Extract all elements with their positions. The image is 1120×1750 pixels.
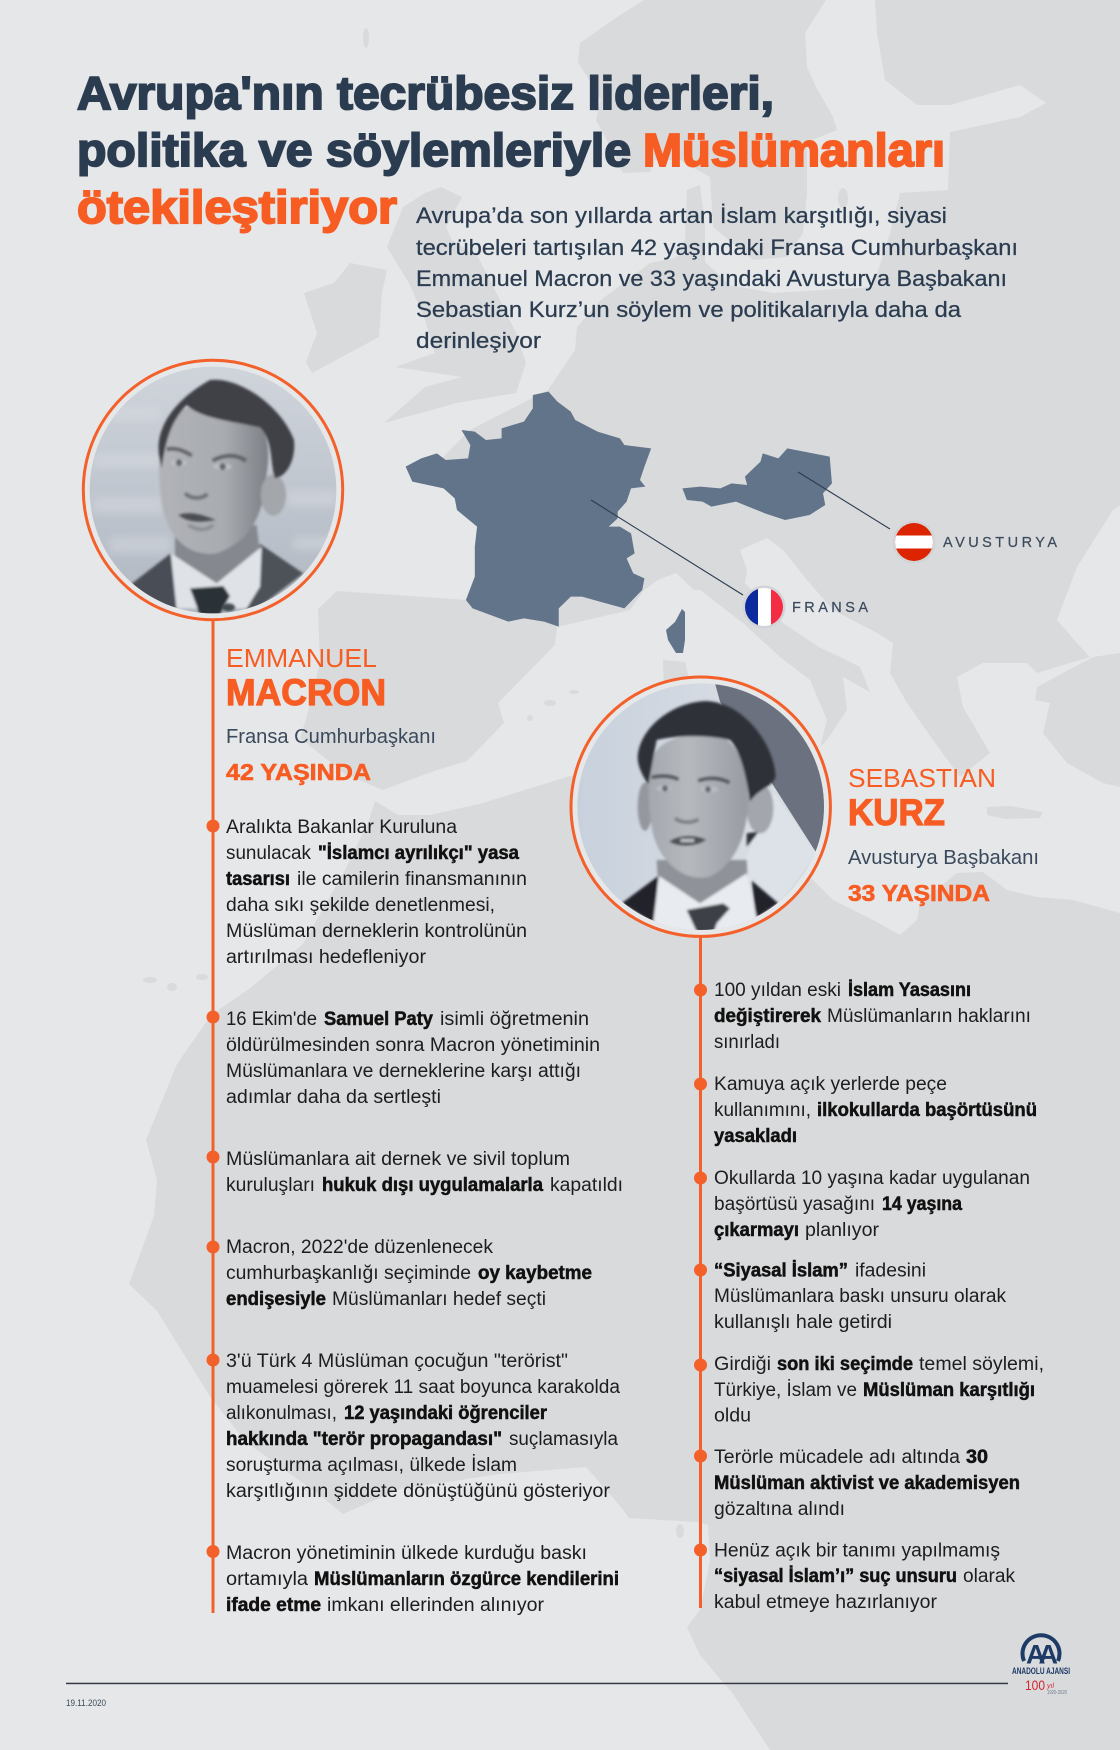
Kurz item 1	[694, 980, 1031, 1053]
Macron item 5: soruşturma açılması, ülkede İslam	[226, 1455, 517, 1476]
Macron item 6	[206, 1543, 619, 1616]
Kurz item 4: “Siyasal İslam”	[714, 1260, 848, 1282]
title: Avrupa'nın tecrübesiz liderleri,	[77, 67, 774, 119]
logo: Anadolu Ajansı: 100	[1025, 1677, 1045, 1693]
Macron item 6: Müslümanların özgürce kendilerini	[314, 1569, 619, 1590]
Macron item 1: artırılması hedefleniyor	[226, 947, 427, 968]
Kurz item 1: değiştirerek	[714, 1006, 821, 1027]
Kurz item 5: Türkiye, İslam ve	[714, 1380, 857, 1401]
Kurz item 7: “siyasal İslam’ı” suç unsuru	[714, 1566, 957, 1587]
Macron item 5: hakkında "terör propagandası"	[226, 1429, 502, 1450]
Macron item 5: karşıtlığının şiddete dönüştüğünü gösteriyor	[226, 1481, 611, 1502]
Macron item 1: Aralıkta Bakanlar Kuruluna	[226, 817, 457, 838]
map: Austria	[682, 448, 832, 520]
Macron item 5: suçlamasıyla	[509, 1429, 618, 1450]
Macron item 5	[206, 1351, 620, 1502]
portrait: Emmanuel Macron	[83, 360, 343, 620]
title: politika ve söylemleriyle	[77, 124, 631, 176]
Kurz item 6: Terörle mücadele adı altında	[714, 1447, 960, 1468]
title: ötekileştiriyor	[77, 181, 397, 233]
Kurz item 1: 100 yıldan eski	[714, 980, 841, 1001]
logo: Anadolu Ajansı: 1920-2020	[1047, 1690, 1067, 1696]
Macron item 2: öldürülmesinden sonra Macron yönetiminin	[226, 1035, 600, 1056]
Kurz item 7: kabul etmeye hazırlanıyor	[714, 1592, 938, 1613]
Kurz item 5: Müslüman karşıtlığı	[863, 1380, 1035, 1401]
callout: Austria	[798, 472, 1057, 564]
Macron item 5: 12 yaşındaki öğrenciler	[344, 1403, 548, 1424]
Macron item 1: tasarısı	[226, 869, 290, 890]
logo: Anadolu Ajansı: yıl	[1046, 1683, 1054, 1690]
Kurz item 3: çıkarmayı	[714, 1220, 799, 1241]
Kurz item 2: kullanımını,	[714, 1100, 811, 1121]
Kurz item 5: son iki seçimde	[777, 1354, 913, 1375]
Macron item 3: kapatıldı	[550, 1175, 623, 1196]
Kurz item 4: Müslümanlara baskı unsuru olarak	[714, 1286, 1006, 1307]
callout: France	[591, 500, 868, 628]
Macron item 2: Müslümanlara ve derneklerine karşı attığı	[226, 1061, 581, 1082]
Macron item 2: isimli öğretmenin	[440, 1009, 589, 1030]
heading: Kurz: SEBASTIAN	[848, 763, 996, 793]
Kurz item 3: 14 yaşına	[882, 1194, 962, 1215]
Kurz item 3	[694, 1168, 1030, 1241]
intro text: Avrupa’da son yıllarda artan İslam karşıtlığı, siyasi	[416, 203, 947, 228]
Macron item 5: 3'ü Türk 4 Müslüman çocuğun "terörist"	[226, 1351, 568, 1372]
title	[77, 67, 945, 233]
heading: Kurz: KURZ	[848, 792, 945, 833]
Kurz item 5	[694, 1354, 1044, 1426]
Macron item 1: daha sıkı şekilde denetlenmesi,	[226, 895, 495, 916]
intro text: tecrübeleri tartışılan 42 yaşındaki Fransa Cumhurbaşkanı	[416, 235, 1018, 260]
Kurz item 2: yasakladı	[714, 1126, 797, 1147]
intro text	[416, 203, 1018, 353]
map: France	[406, 392, 651, 627]
heading: Macron: MACRON	[226, 672, 386, 713]
Macron item 2: adımlar daha da sertleşti	[226, 1087, 441, 1108]
Macron item 3	[206, 1149, 623, 1196]
Kurz item 2: ilkokullarda başörtüsünü	[817, 1100, 1037, 1121]
logo: Anadolu Ajansı	[1012, 1635, 1070, 1696]
Kurz item 2: Kamuya açık yerlerde peçe	[714, 1074, 947, 1095]
Kurz item 7: olarak	[963, 1566, 1016, 1587]
Macron item 2: Samuel Paty	[324, 1009, 433, 1030]
Macron item 6: ortamıyla	[226, 1569, 308, 1590]
Macron item 4: cumhurbaşkanlığı seçiminde	[226, 1263, 471, 1284]
intro text: Sebastian Kurz’un söylem ve politikalarıyla daha da	[416, 297, 962, 322]
Macron item 4: Macron, 2022'de düzenlenecek	[226, 1237, 493, 1258]
Kurz item 3: başörtüsü yasağını	[714, 1194, 875, 1215]
Kurz item 6: Müslüman aktivist ve akademisyen	[714, 1473, 1020, 1494]
Macron item 3: hukuk dışı uygulamalarla	[322, 1175, 543, 1196]
Kurz item 3: planlıyor	[805, 1220, 880, 1241]
Macron item 1: Müslüman derneklerin kontrolünün	[226, 921, 527, 942]
Kurz item 3: Okullarda 10 yaşına kadar uygulanan	[714, 1168, 1030, 1189]
Kurz item 1: Müslümanların haklarını	[827, 1006, 1031, 1027]
right timeline line	[699, 935, 702, 1608]
heading: Macron	[226, 643, 436, 785]
callout: Austria: AVUSTURYA	[943, 535, 1057, 551]
Macron item 2	[206, 1009, 600, 1108]
heading: Macron: 42 YAŞINDA	[226, 759, 371, 785]
heading: Kurz: Avusturya Başbakanı	[848, 847, 1039, 869]
Macron item 5: alıkonulması,	[226, 1403, 337, 1424]
Macron item 3: kuruluşları	[226, 1175, 315, 1196]
Macron item 3: Müslümanlara ait dernek ve sivil toplum	[226, 1149, 570, 1170]
Macron item 4: oy kaybetme	[478, 1263, 592, 1284]
heading: Kurz: 33 YAŞINDA	[848, 880, 990, 906]
Kurz item 1: İslam Yasasını	[848, 980, 971, 1001]
Kurz item 4	[694, 1260, 1006, 1333]
Kurz item 4: kullanışlı hale getirdi	[714, 1312, 892, 1333]
intro text: Emmanuel Macron ve 33 yaşındaki Avusturya Başbakanı	[416, 266, 1007, 291]
Macron item 1: ile camilerin finansmanının	[297, 869, 527, 890]
Kurz item 7: Henüz açık bir tanımı yapılmamış	[714, 1540, 1000, 1562]
Macron item 4: Müslümanları hedef seçti	[332, 1289, 546, 1310]
Kurz item 7	[694, 1540, 1016, 1613]
heading: Macron: EMMANUEL	[226, 643, 377, 673]
Kurz item 6: 30	[966, 1447, 988, 1468]
Kurz item 2	[694, 1074, 1037, 1147]
Kurz item 5: oldu	[714, 1406, 751, 1426]
heading: Kurz	[848, 763, 1039, 906]
title: Müslümanları	[643, 124, 945, 176]
Kurz item 1: sınırladı	[714, 1032, 780, 1053]
Macron item 1: sunulacak	[226, 843, 311, 864]
Macron item 6: ifade etme	[226, 1595, 321, 1616]
Kurz item 6	[694, 1447, 1020, 1520]
map: Corsica	[666, 609, 685, 653]
intro text: derinleşiyor	[416, 328, 541, 353]
footer rule	[66, 1683, 1008, 1684]
Macron item 2: 16 Ekim'de	[226, 1009, 317, 1030]
Macron item 4	[206, 1237, 592, 1310]
Macron item 1: "İslamcı ayrılıkçı" yasa	[318, 843, 519, 864]
portrait: Sebastian Kurz	[571, 677, 830, 937]
logo: Anadolu Ajansı: ANADOLU AJANSI	[1012, 1666, 1070, 1677]
Macron item 5: muamelesi görerek 11 saat boyunca karakolda	[226, 1377, 620, 1398]
Kurz item 6: gözaltına alındı	[714, 1499, 845, 1520]
logo: Anadolu Ajansı: AA	[1026, 1640, 1057, 1670]
Macron item 1	[206, 817, 527, 968]
Macron item 6: imkanı ellerinden alınıyor	[327, 1595, 545, 1616]
Kurz item 5: temel söylemi,	[919, 1354, 1044, 1375]
Kurz item 5: Girdiği	[714, 1354, 771, 1375]
callout: France: FRANSA	[792, 600, 868, 616]
left timeline line	[212, 618, 214, 1613]
heading: Macron: Fransa Cumhurbaşkanı	[226, 726, 436, 748]
Macron item 6: Macron yönetiminin ülkede kurduğu baskı	[226, 1543, 587, 1564]
date: 19.11.2020	[66, 1698, 106, 1708]
Macron item 4: endişesiyle	[226, 1289, 326, 1310]
Kurz item 4: ifadesini	[855, 1260, 926, 1282]
